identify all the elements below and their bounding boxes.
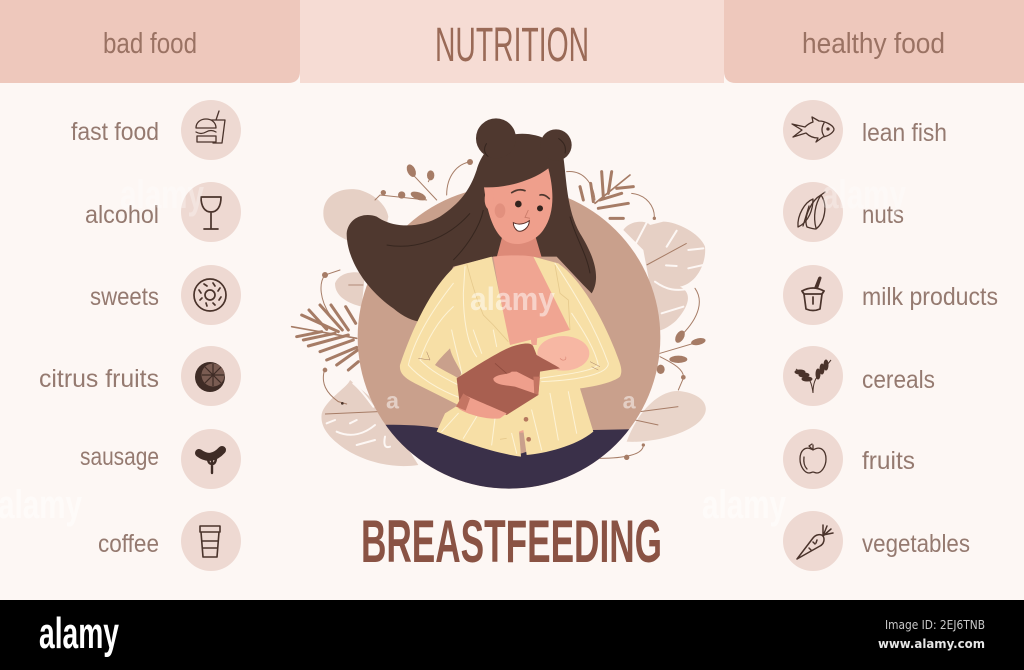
header: healthy food: healthy food <box>802 28 945 60</box>
tan circle backdrop <box>358 186 660 489</box>
item: vegetables <box>783 511 970 571</box>
item: fruits <box>783 429 915 489</box>
item: fast food <box>71 100 241 160</box>
footer bar: Image ID: 2EJ6TNB <box>885 618 985 632</box>
dark trousers <box>386 424 630 489</box>
footer bar: www.alamy.com <box>878 636 985 651</box>
item: cereals: cereals <box>862 366 935 394</box>
item: vegetables: vegetables <box>862 530 970 558</box>
item: lean fish <box>783 100 947 160</box>
item: citrus fruits: citrus fruits <box>39 365 159 393</box>
watermark: a <box>386 387 400 413</box>
item: nuts <box>783 182 904 242</box>
faint watermarks: alamy <box>120 173 205 217</box>
header: healthy food <box>724 0 1024 83</box>
illustration: mother breastfeeding <box>292 118 706 500</box>
item: sausage: sausage <box>80 443 159 471</box>
watermark: a <box>623 387 637 413</box>
mother's hands <box>456 332 540 419</box>
faint watermarks: alamy <box>0 483 83 527</box>
title: breastfeeding: BREASTFEEDING <box>361 508 662 575</box>
watermark <box>386 280 637 413</box>
item: nuts: nuts <box>862 201 904 229</box>
branches and berries <box>292 159 706 460</box>
chest <box>493 255 572 433</box>
yellow striped jacket <box>400 257 621 457</box>
item: sausage <box>80 429 241 489</box>
item: fast food: fast food <box>71 118 159 146</box>
panel: healthy food list <box>783 100 998 571</box>
header: bad food <box>0 0 300 83</box>
neck <box>497 235 542 257</box>
palm frond right <box>567 172 706 460</box>
item: coffee <box>98 511 241 571</box>
item: fruits: fruits <box>862 447 915 475</box>
item: cereals <box>783 346 935 406</box>
header: bad food: bad food <box>103 28 197 60</box>
faint watermarks: alamy <box>822 173 907 217</box>
item: sweets: sweets <box>90 283 159 311</box>
item: milk products <box>783 265 998 325</box>
header: nutrition title: NUTRITION <box>435 19 589 72</box>
footer bar <box>0 600 1024 670</box>
item: alcohol: alcohol <box>85 201 159 229</box>
baby <box>457 336 589 415</box>
watermark: alamy <box>470 280 555 317</box>
item: citrus fruits <box>39 346 241 406</box>
faint watermarks <box>0 173 907 527</box>
item: sweets <box>90 265 241 325</box>
long brown hair <box>347 118 596 322</box>
face <box>484 168 552 244</box>
torso with baby <box>400 255 621 457</box>
palm frond left <box>292 270 358 405</box>
footer bar: alamy <box>39 609 119 658</box>
header: nutrition title <box>300 0 724 83</box>
item: milk products: milk products <box>862 283 998 311</box>
item: alcohol <box>85 182 241 242</box>
background leaves <box>321 189 706 466</box>
panel: bad food list <box>39 100 241 571</box>
item: coffee: coffee <box>98 530 159 558</box>
item: lean fish: lean fish <box>862 119 947 147</box>
faint watermarks: alamy <box>702 483 787 527</box>
